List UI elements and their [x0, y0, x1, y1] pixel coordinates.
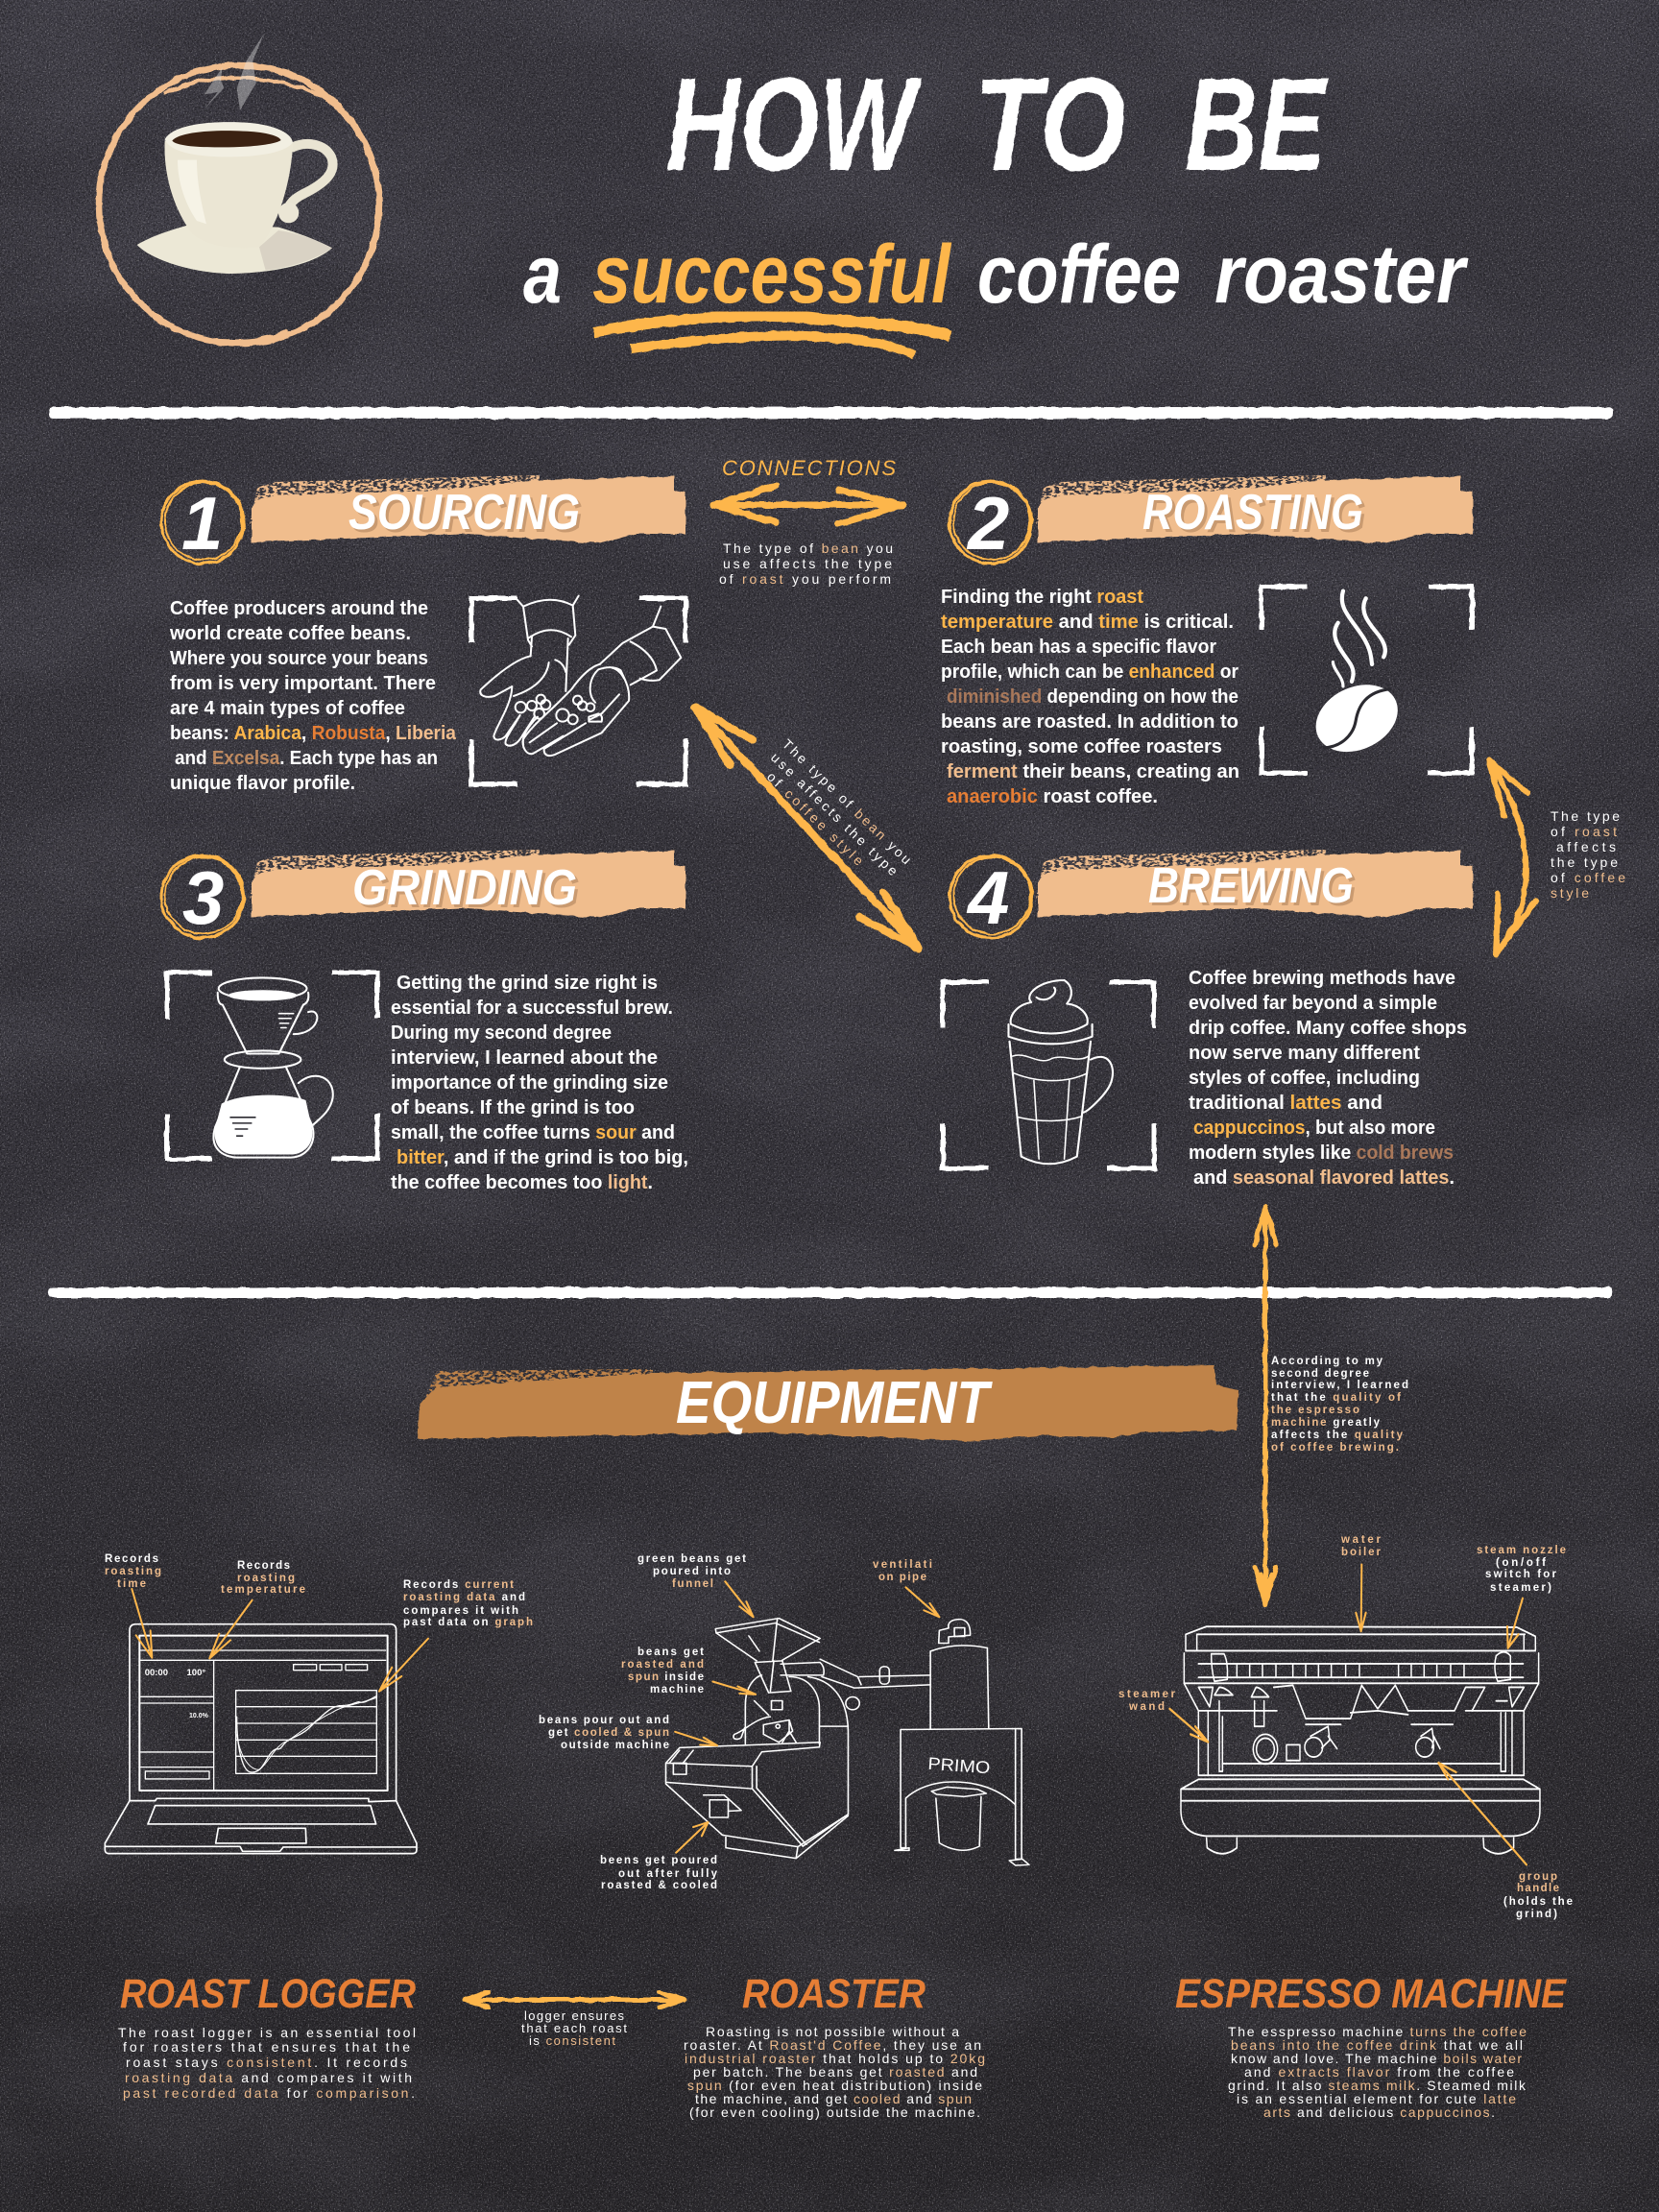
- heading banner: grinding: GRINDING: [352, 860, 577, 916]
- label: steamer wand: wand: [1128, 1701, 1165, 1713]
- text: roaster: the machine, and get cooled and spun: [695, 2091, 972, 2106]
- brewing text: and seasonal flavored lattes.: [1193, 1167, 1455, 1189]
- label: steam nozzle: steamer): [1490, 1582, 1551, 1594]
- title: [523, 51, 1469, 355]
- callout: espresso machine quality: According to my: [1271, 1356, 1383, 1367]
- number badge 4: [950, 855, 1032, 940]
- sourcing text: from is very important. There: [170, 673, 436, 694]
- brewing text: now serve many different: [1189, 1043, 1420, 1064]
- heading banner: brewing: BREWING: [1151, 861, 1357, 917]
- connection text: bean to roast: use affects the type: [723, 556, 892, 571]
- subtitle: coffee: [977, 228, 1181, 321]
- text: roast logger: roast stays consistent. It records: [126, 2055, 407, 2070]
- label: funnel: poured into: [653, 1566, 731, 1577]
- heading: roast logger: ROAST LOGGER: [120, 1971, 416, 2017]
- text: roast logger: [118, 2025, 416, 2101]
- connection text: bean to roast: of roast you perform: [719, 571, 891, 587]
- subtitle underline: [593, 316, 950, 355]
- connection text: logger consistency: is consistent: [529, 2033, 615, 2048]
- arrow: to steam nozzle: [1507, 1599, 1523, 1648]
- title line: how to be: BE: [1185, 51, 1329, 199]
- icon: pour-over dripper and carafe: [167, 973, 377, 1159]
- connection text: logger consistency: logger ensures: [524, 2008, 624, 2023]
- heading banner: sourcing: SOURCING: [349, 485, 580, 541]
- text: espresso machine: [1228, 2024, 1527, 2120]
- callout: espresso machine quality: of coffee brewing.: [1271, 1442, 1399, 1454]
- arrow: sourcing to brewing: [695, 708, 919, 949]
- sourcing text: are 4 main types of coffee: [170, 698, 405, 719]
- callout: espresso machine quality: interview, I learned: [1271, 1380, 1408, 1391]
- grinding text: [391, 973, 688, 1193]
- heading banner: equipment: [418, 1365, 1238, 1441]
- grinding text: importance of the grinding size: [391, 1072, 668, 1094]
- panel: sourcing: [161, 475, 685, 794]
- label: steam nozzle: [1477, 1545, 1566, 1594]
- grinding text: interview, I learned about the: [391, 1047, 658, 1069]
- heading banner: roasting: ROASTING: [1145, 488, 1366, 543]
- subtitle: roaster: [1214, 228, 1469, 321]
- connection text: roast to coffee style: of roast: [1551, 824, 1617, 839]
- label: poured out: roasted & cooled: [601, 1880, 717, 1891]
- roasting text: profile, which can be enhanced or: [941, 661, 1238, 683]
- text: espresso machine: grind. It also steams milk. Steamed milk: [1228, 2078, 1527, 2093]
- arrow: to roasting time: [132, 1589, 152, 1658]
- callout: espresso machine quality: machine greatly: [1271, 1417, 1381, 1429]
- divider top: [48, 407, 1613, 419]
- icon: laptop with roast graph: 10.0%: [189, 1713, 209, 1719]
- label: cooled and spun: get cooled & spun: [548, 1727, 669, 1739]
- sourcing text: Where you source your beans: [170, 648, 428, 669]
- heading banner: sourcing: [250, 475, 685, 543]
- connection text: bean to roast: [719, 541, 893, 587]
- label: current data and graph: [403, 1579, 533, 1628]
- icon: hands holding beans: [471, 596, 685, 784]
- brewing text: traditional lattes and: [1189, 1093, 1382, 1114]
- text: espresso machine: know and love. The machine boils water: [1231, 2051, 1522, 2066]
- roasting text: anaerobic roast coffee.: [947, 786, 1158, 807]
- panel: grinding: [161, 850, 688, 1193]
- label: steamer wand: steamer: [1118, 1689, 1176, 1700]
- connection text: bean to coffee style: The type of bean you: [780, 736, 915, 867]
- brewing text: Coffee brewing methods have: [1189, 968, 1455, 989]
- text: roast logger: The roast logger is an essential tool: [118, 2025, 416, 2040]
- arrow: to graph: [379, 1639, 428, 1692]
- label: group handle: group: [1519, 1871, 1557, 1883]
- text: roast logger: for roasters that ensures that the: [123, 2039, 410, 2055]
- subtitle: successful: [592, 228, 952, 321]
- label: ventilation pipe: on pipe: [878, 1572, 926, 1583]
- connection text: bean to roast: The type of bean you: [723, 541, 893, 556]
- number badge 2: [950, 481, 1032, 565]
- brewing text: styles of coffee, including: [1189, 1068, 1420, 1089]
- divider middle: [48, 1287, 1613, 1298]
- arrow: to chute: [676, 1822, 708, 1853]
- connection text: roast to coffee style: affects: [1556, 839, 1616, 854]
- cup and saucer: [137, 122, 333, 274]
- brewing text: [1189, 968, 1467, 1189]
- number badge 4: 4: [966, 855, 1009, 940]
- section: roast logger description: [118, 1971, 416, 2101]
- number badge 3: [161, 855, 244, 940]
- subtitle: a: [523, 228, 562, 321]
- title line: how to be: [666, 51, 1329, 199]
- sourcing text: unique flavor profile.: [170, 773, 355, 794]
- number badge 1: [161, 481, 244, 565]
- section: espresso machine description: [1175, 1971, 1567, 2120]
- text: espresso machine: arts and delicious cappuccinos.: [1263, 2104, 1495, 2120]
- label: ventilation pipe: [873, 1559, 932, 1583]
- arrow: logger to roaster: [465, 1992, 685, 2008]
- text: roaster: Roasting is not possible without a: [706, 2024, 959, 2039]
- label: cooled and spun: [539, 1715, 669, 1751]
- arrow: to water boiler: [1356, 1565, 1366, 1631]
- grinding text: small, the coffee turns sour and: [391, 1122, 675, 1143]
- text: roaster: (for even cooling) outside the machine.: [689, 2104, 980, 2120]
- roasting text: Each bean has a specific flavor: [941, 637, 1216, 658]
- title line: how to be: HOW: [666, 51, 923, 199]
- roasting text: roasting, some coffee roasters: [941, 736, 1222, 757]
- label: funnel: green beans get: [637, 1553, 746, 1565]
- text: roaster: industrial roaster that holds up to 20kg: [685, 2051, 985, 2066]
- text: roaster: [684, 2024, 985, 2120]
- section: roaster description: [684, 1971, 985, 2120]
- label: steam nozzle: (on/off: [1496, 1557, 1546, 1569]
- text: roast logger: roasting data and compares it with: [125, 2070, 412, 2085]
- label: cooled and spun: beans pour out and: [539, 1715, 669, 1726]
- icon: laptop with roast graph: [105, 1624, 417, 1854]
- grinding text: bitter, and if the grind is too big,: [397, 1147, 688, 1168]
- label: group handle: handle: [1517, 1883, 1559, 1894]
- label: steam nozzle: switch for: [1485, 1569, 1557, 1580]
- label: steamer wand: [1118, 1689, 1176, 1713]
- label: current data and graph: roasting data and: [403, 1592, 525, 1603]
- label: funnel: [637, 1553, 746, 1590]
- text: roaster: spun (for even heat distribution) inside: [687, 2078, 982, 2093]
- callout: espresso machine quality: that the quality of: [1271, 1392, 1401, 1404]
- grinding text: the coffee becomes too light.: [391, 1172, 653, 1193]
- grinding text: Getting the grind size right is: [397, 973, 658, 994]
- text: roast logger: past recorded data for comparison.: [123, 2085, 415, 2101]
- heading banner: brewing: [1036, 850, 1473, 918]
- roasting text: Finding the right roast: [941, 587, 1143, 608]
- panel: brewing: [943, 850, 1473, 1189]
- panel: roaster: [539, 1553, 1029, 1891]
- label: roasted and spun: [621, 1647, 704, 1695]
- label: poured out: beens get poured: [600, 1855, 717, 1866]
- label: current data and graph: compares it with: [403, 1605, 518, 1617]
- text: espresso machine: The esspresso machine turns the coffee: [1228, 2024, 1527, 2039]
- label: roasting time: [105, 1553, 161, 1590]
- label: group handle: grind): [1516, 1909, 1557, 1920]
- label: roasting temperature: Records: [237, 1560, 290, 1572]
- arrow: to steamer wand: [1169, 1709, 1208, 1743]
- label: water boiler: [1340, 1534, 1382, 1558]
- icon: roasted bean with steam: [1262, 587, 1472, 773]
- arrow: roasting to brewing (curved): [1489, 760, 1536, 954]
- sourcing text: and Excelsa. Each type has an: [175, 748, 438, 769]
- sourcing text: Coffee producers around the: [170, 598, 428, 619]
- heading banner: equipment: EQUIPMENT: [676, 1370, 994, 1436]
- arrow: brewing to espresso machine (vertical): [1255, 1206, 1276, 1605]
- brewing text: drip coffee. Many coffee shops: [1189, 1018, 1467, 1039]
- connection text: logger consistency: [521, 2008, 627, 2048]
- arrow: sourcing to roasting: [714, 486, 902, 524]
- callout: espresso machine quality: the espresso: [1271, 1405, 1359, 1416]
- number badge 1: 1: [181, 481, 223, 565]
- heading banner: grinding: [250, 850, 685, 919]
- roasting text: temperature and time is critical.: [941, 612, 1234, 633]
- number badge 2: 2: [966, 481, 1009, 565]
- roasting text: beans are roasted. In addition to: [941, 711, 1238, 733]
- label: current data and graph: past data on graph: [403, 1617, 533, 1628]
- arrow: to ventilation pipe: [905, 1587, 939, 1617]
- brewing text: cappuccinos, but also more: [1193, 1118, 1435, 1139]
- steam: [204, 34, 264, 110]
- panel: roast logger: [105, 1553, 533, 1854]
- label: current data and graph: Records current: [403, 1579, 514, 1591]
- connection text: roast to coffee style: of coffee: [1551, 870, 1625, 885]
- sourcing text: beans: Arabica, Robusta, Liberia: [170, 723, 457, 744]
- panel: espresso machine: [1118, 1534, 1573, 1920]
- label: roasting time: roasting: [105, 1566, 161, 1577]
- text: roaster: per batch. The beans get roasted and: [693, 2064, 977, 2080]
- heading banner: sourcing: SOURCING: [351, 488, 583, 543]
- connection text: roast to coffee style: style: [1551, 885, 1589, 901]
- icon: roaster machine: [666, 1619, 1029, 1865]
- text: espresso machine: beans into the coffee drink that we all: [1231, 2037, 1523, 2053]
- label: roasting temperature: temperature: [221, 1584, 305, 1596]
- heading banner: brewing: BREWING: [1148, 858, 1354, 914]
- label: roasting temperature: [221, 1560, 305, 1596]
- callout: espresso machine quality: affects the quality: [1271, 1430, 1404, 1441]
- grinding text: essential for a successful brew.: [391, 998, 673, 1019]
- label: roasted and spun: spun inside: [628, 1671, 704, 1683]
- arrow: to cooling tray: [675, 1732, 717, 1745]
- label: cooled and spun: outside machine: [561, 1740, 669, 1751]
- heading banner: roasting: ROASTING: [1142, 485, 1363, 541]
- text: roaster: roaster. At Roast'd Coffee, they use an: [684, 2037, 981, 2053]
- label: roasted and spun: machine: [650, 1684, 704, 1695]
- brewing text: modern styles like cold brews: [1189, 1142, 1454, 1164]
- arrow: to group handle: [1438, 1763, 1527, 1864]
- icon: coffee cup in chalk ring: [98, 34, 379, 344]
- grinding text: of beans. If the grind is too: [391, 1097, 635, 1118]
- connection text: bean to coffee style: use affects the type: [768, 750, 901, 878]
- roasting text: diminished depending on how the: [947, 686, 1238, 708]
- subtitle: [523, 228, 1469, 321]
- label: water boiler: water: [1340, 1534, 1382, 1546]
- label: group handle: [1503, 1871, 1573, 1920]
- connection text: roast to coffee style: the type: [1551, 854, 1618, 870]
- sourcing text: world create coffee beans.: [169, 623, 411, 644]
- sourcing text: [169, 598, 457, 794]
- title line: how to be: TO: [974, 51, 1126, 199]
- icon: latte glass: [943, 980, 1154, 1168]
- label: steam nozzle: steam nozzle: [1477, 1545, 1566, 1556]
- label: roasted and spun: beans get: [637, 1647, 704, 1658]
- arrow: to roasting temperature: [209, 1600, 252, 1658]
- text: espresso machine: and extracts flavor from the coffee: [1244, 2064, 1514, 2080]
- label: poured out: out after fully: [618, 1868, 718, 1880]
- arrow: to funnel: [725, 1581, 754, 1617]
- icon: roaster machine: PRIMO: [927, 1754, 991, 1777]
- connection text: roast to coffee style: [1551, 808, 1625, 901]
- roasting text: [941, 587, 1239, 807]
- grinding text: During my second degree: [391, 1022, 612, 1044]
- label: funnel: funnel: [672, 1578, 713, 1590]
- icon: espresso machine: [1181, 1626, 1540, 1854]
- heading: roaster: ROASTER: [742, 1971, 926, 2017]
- connections label: CONNECTIONS: [722, 456, 896, 480]
- label: roasting time: Records: [105, 1553, 158, 1565]
- callout: espresso machine quality: second degree: [1271, 1368, 1369, 1380]
- callout: espresso machine quality: [1271, 1356, 1408, 1454]
- number badge 3: 3: [182, 855, 224, 940]
- heading banner: grinding: GRINDING: [355, 863, 580, 919]
- heading: espresso machine: ESPRESSO MACHINE: [1175, 1971, 1567, 2017]
- arrow: to drum: [712, 1682, 756, 1695]
- label: group handle: (holds the: [1503, 1896, 1573, 1908]
- label: roasted and spun: roasted and: [621, 1659, 704, 1671]
- label: roasting time: time: [117, 1578, 146, 1590]
- roasting text: ferment their beans, creating an: [947, 761, 1239, 782]
- label: roasting temperature: roasting: [237, 1573, 295, 1584]
- connection text: logger consistency: that each roast: [521, 2021, 627, 2035]
- connection text: roast to coffee style: The type: [1551, 808, 1620, 824]
- label: water boiler: boiler: [1341, 1547, 1382, 1558]
- brewing text: evolved far beyond a simple: [1189, 993, 1437, 1014]
- text: espresso machine: is an essential element for cute latte: [1237, 2091, 1516, 2106]
- connection text: bean to coffee style: of coffee style: [764, 769, 867, 869]
- heading banner: roasting: [1036, 475, 1473, 543]
- label: ventilation pipe: ventilati: [873, 1559, 932, 1571]
- icon: laptop with roast graph: 100°: [186, 1668, 205, 1678]
- panel: roasting: [941, 475, 1473, 807]
- icon: laptop with roast graph: 00:00: [145, 1668, 168, 1678]
- label: poured out: [600, 1855, 718, 1891]
- chalk ring: [98, 65, 379, 344]
